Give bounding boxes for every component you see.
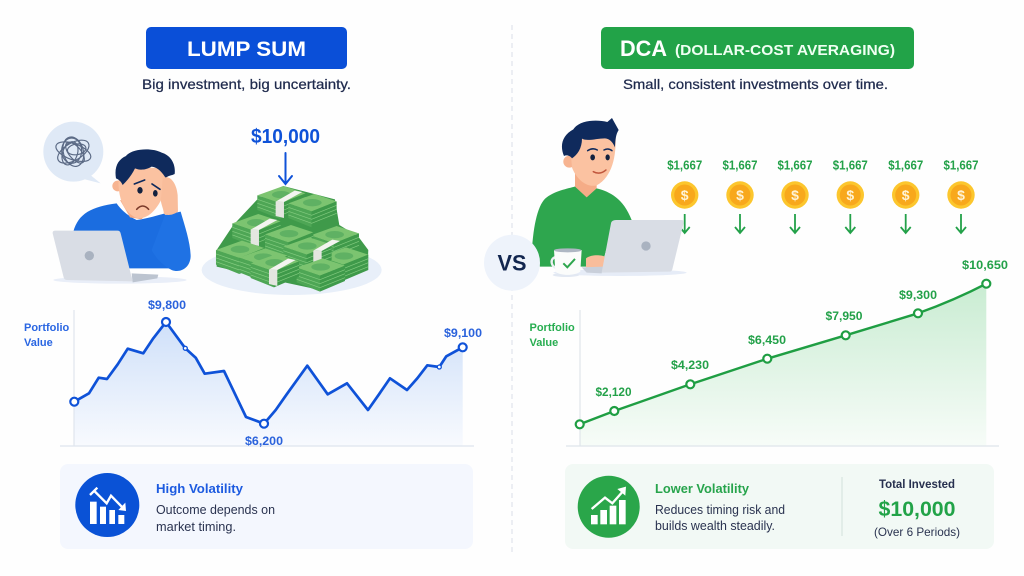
stat: total invested: Total Invested xyxy=(879,477,955,491)
icons: coins xyxy=(671,181,975,209)
icons: coins: $ xyxy=(957,187,965,203)
stat: total invested xyxy=(874,477,960,539)
coin contribution labels: $1,667 xyxy=(888,158,923,172)
axis label: Portfolio xyxy=(24,322,69,334)
chart: dca portfolio value xyxy=(530,258,1008,446)
badge: vs xyxy=(484,235,540,291)
heading: dca xyxy=(601,27,914,69)
axis label: Portfolio xyxy=(530,322,575,334)
heading: lump sum: LUMP SUM xyxy=(187,38,306,61)
text: high volatility xyxy=(156,481,275,534)
mug xyxy=(552,248,582,277)
icons: coins: $ xyxy=(902,187,910,203)
data labels: $6,200 xyxy=(245,434,283,448)
data labels: $10,650 xyxy=(962,258,1008,272)
laptop xyxy=(53,231,158,282)
coin contribution labels: $1,667 xyxy=(667,158,702,172)
subtitle: lump sum: Big investment, big uncertainty. xyxy=(142,76,351,92)
text: high volatility: market timing. xyxy=(156,520,236,534)
callout: $10,000 amount xyxy=(251,126,320,184)
chart: lump sum portfolio value xyxy=(24,298,482,448)
person xyxy=(73,149,191,271)
stat: total invested: (Over 6 Periods) xyxy=(874,525,960,539)
illustration: calm investor xyxy=(532,118,687,277)
data labels xyxy=(596,258,1008,399)
coin contribution labels: $1,667 xyxy=(833,158,868,172)
icon: falling chart xyxy=(75,473,139,537)
card: lower volatility xyxy=(565,464,994,549)
text: lower volatility: Reduces timing risk and xyxy=(655,503,785,517)
coin contribution labels: $1,667 xyxy=(722,158,758,172)
data labels: $9,100 xyxy=(444,326,482,340)
illustration: pile of cash xyxy=(202,186,382,295)
stat: total invested: $10,000 xyxy=(878,498,956,521)
text: lower volatility xyxy=(655,481,785,533)
icons: coins: $ xyxy=(846,187,854,203)
data labels: $6,450 xyxy=(748,333,786,347)
data labels: $4,230 xyxy=(671,358,709,372)
heading: dca: DCA xyxy=(620,36,667,61)
illustration: worried investor xyxy=(43,122,191,284)
arrows: contributions xyxy=(680,214,966,233)
panel: dca xyxy=(530,27,1008,549)
text: lower volatility: builds wealth steadily. xyxy=(655,519,775,533)
coin contribution labels xyxy=(667,158,979,172)
data labels: $9,800 xyxy=(148,298,186,312)
text: high volatility: Outcome depends on xyxy=(156,503,275,517)
icons: coins: $ xyxy=(681,187,689,203)
divider xyxy=(511,25,513,552)
icon: rising chart xyxy=(578,476,640,538)
data labels: $7,950 xyxy=(826,309,863,323)
icons: coins: $ xyxy=(791,187,799,203)
heading: dca: (DOLLAR-COST AVERAGING) xyxy=(675,42,895,59)
text: high volatility: High Volatility xyxy=(156,481,244,496)
card: high volatility xyxy=(60,464,473,549)
coin contribution labels: $1,667 xyxy=(778,158,813,172)
data labels xyxy=(148,298,482,448)
icons: coins: $ xyxy=(736,187,744,203)
text: lower volatility: Lower Volatility xyxy=(655,481,750,496)
data labels: $9,300 xyxy=(899,288,937,302)
callout: $10,000 amount: $10,000 xyxy=(251,126,320,148)
person xyxy=(532,118,632,267)
coin contribution labels: $1,667 xyxy=(944,158,979,172)
subtitle: dca: Small, consistent investments over time. xyxy=(623,76,888,92)
data labels: $2,120 xyxy=(596,385,632,399)
panel: lump sum xyxy=(24,27,482,549)
heading: lump sum xyxy=(146,27,347,69)
badge: vs: VS xyxy=(498,250,526,276)
axis label: Value xyxy=(530,337,558,349)
laptop xyxy=(582,220,684,273)
thought bubble xyxy=(43,122,103,183)
axis label: Value xyxy=(24,337,53,349)
